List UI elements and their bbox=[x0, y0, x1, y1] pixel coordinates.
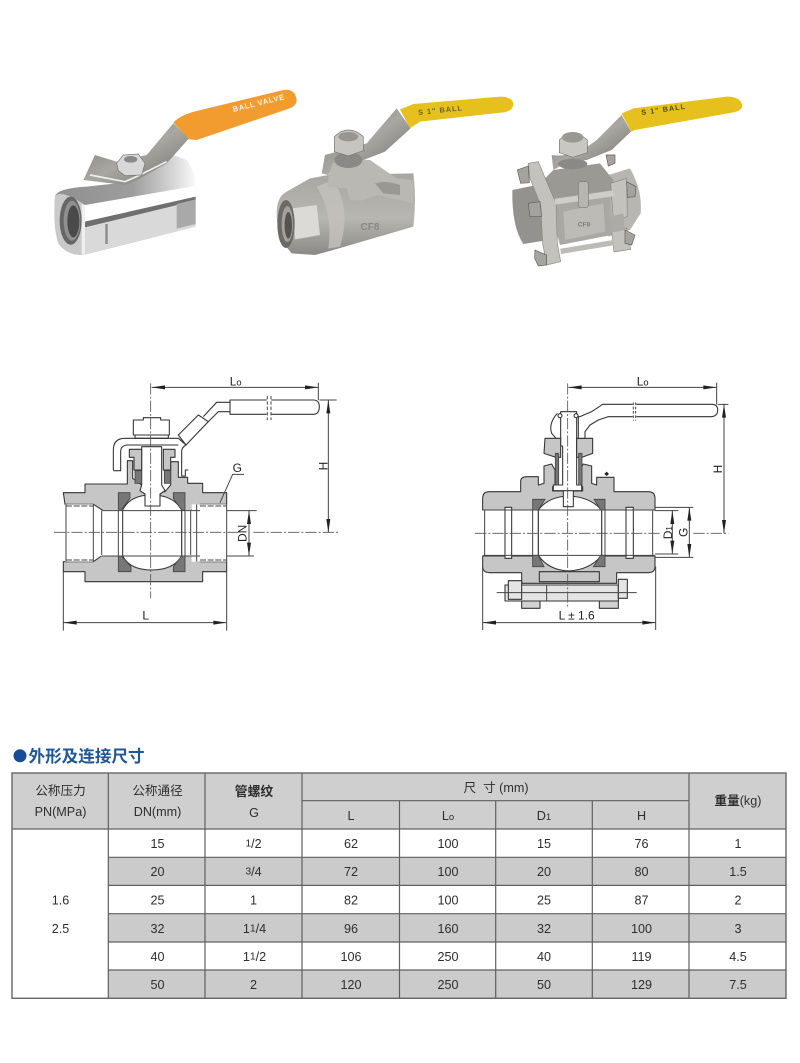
thread label G bbox=[220, 461, 244, 503]
centre lines bbox=[54, 383, 338, 598]
row DN20: 100 bbox=[437, 865, 459, 879]
stem bbox=[140, 447, 165, 506]
dimension H: H bbox=[711, 465, 725, 473]
heading bullet bbox=[14, 749, 26, 762]
row DN25: 82 bbox=[344, 894, 358, 908]
row DN25: 1 bbox=[250, 894, 257, 908]
dimension Lo: Lo bbox=[230, 375, 242, 389]
gland and packing bbox=[544, 438, 593, 485]
column headers: D1 bbox=[537, 809, 551, 823]
end face bbox=[54, 194, 85, 255]
flanges bbox=[528, 162, 561, 265]
header background bbox=[12, 773, 786, 829]
dimension L: L bbox=[142, 609, 149, 623]
body marking: CF8 bbox=[578, 222, 591, 229]
handle grip bbox=[230, 400, 319, 414]
steel lever bbox=[322, 108, 411, 175]
steel lever bbox=[83, 123, 189, 185]
row DN15 bbox=[150, 837, 742, 851]
row DN50: 2 bbox=[250, 978, 257, 992]
row DN50: 50 bbox=[150, 978, 165, 992]
row DN25 bbox=[150, 894, 742, 908]
dimension Lo bbox=[568, 375, 717, 404]
row DN40: 1 bbox=[250, 950, 256, 962]
row DN32: 160 bbox=[437, 922, 459, 936]
orange grip bbox=[173, 90, 297, 140]
row DN32: 32 bbox=[150, 922, 165, 936]
yellow grip bbox=[400, 97, 513, 128]
dimension G: G bbox=[677, 528, 691, 537]
dimension H bbox=[711, 404, 728, 533]
row DN40: 106 bbox=[340, 950, 362, 964]
bolt heads bbox=[517, 155, 636, 266]
row DN15: 1 bbox=[245, 838, 251, 850]
row DN50: 120 bbox=[340, 978, 362, 992]
row DN25: 100 bbox=[437, 894, 459, 908]
upper body section bbox=[63, 461, 227, 511]
row DN32: /4 bbox=[256, 922, 266, 936]
pressure values: 1.6 bbox=[52, 894, 69, 908]
dimensions table bbox=[12, 773, 786, 998]
stem nut bbox=[133, 418, 169, 438]
row DN40: 1 bbox=[243, 950, 250, 964]
row DN15: 100 bbox=[437, 837, 459, 851]
photo: one-piece ball valve with orange handle bbox=[54, 90, 297, 255]
body marking: CF8 bbox=[361, 222, 380, 233]
valve body bbox=[55, 155, 196, 255]
column headers: 尺 寸 (mm) bbox=[463, 781, 529, 795]
photo: three-piece ball valve with yellow handle bbox=[512, 97, 742, 266]
lower body section bbox=[483, 556, 655, 583]
column headers: 公称压力 bbox=[35, 784, 86, 798]
bore and ball bbox=[483, 496, 655, 571]
row DN25: 25 bbox=[150, 894, 165, 908]
photo: two-piece ball valve with yellow handle: S 1" BALL bbox=[418, 103, 463, 117]
dimension Lo bbox=[152, 375, 318, 400]
lower body section bbox=[63, 555, 227, 582]
pressure values: 2.5 bbox=[52, 922, 69, 936]
gland and packing bbox=[129, 449, 175, 483]
row DN15: 62 bbox=[344, 837, 358, 851]
upper body bbox=[543, 163, 613, 205]
steel lever bbox=[552, 115, 631, 170]
tie rods bbox=[555, 193, 613, 202]
row DN40: 40 bbox=[150, 950, 165, 964]
dimension L tolerance: L ± 1.6 bbox=[559, 609, 595, 623]
row DN50: 7.5 bbox=[729, 978, 747, 992]
section heading bbox=[14, 747, 145, 766]
row DN32: 3 bbox=[734, 922, 742, 936]
stop plate bbox=[113, 438, 188, 476]
row DN40: 40 bbox=[537, 950, 551, 964]
photo: three-piece ball valve with yellow handle: S 1" BALL bbox=[641, 102, 687, 117]
column headers: 管螺纹 bbox=[235, 784, 273, 799]
dimension H bbox=[316, 400, 337, 532]
row DN32: 32 bbox=[537, 922, 551, 936]
stem nut bbox=[558, 159, 587, 169]
row DN15: /2 bbox=[251, 837, 262, 851]
row DN20: 72 bbox=[344, 865, 358, 879]
centre lines bbox=[475, 383, 728, 607]
row DN20: 20 bbox=[537, 865, 551, 879]
bore and ball bbox=[65, 495, 227, 570]
striped rows background bbox=[108, 857, 786, 998]
row DN32: 1 bbox=[250, 922, 256, 934]
stem bbox=[553, 412, 582, 507]
row DN32 bbox=[150, 922, 742, 936]
row DN20 bbox=[150, 865, 747, 879]
row DN25: 2 bbox=[734, 894, 742, 908]
row DN25: 25 bbox=[537, 894, 551, 908]
dimension DN bbox=[227, 511, 257, 556]
row DN40 bbox=[150, 950, 747, 964]
threaded port bbox=[60, 197, 82, 245]
row DN15: 1 bbox=[734, 837, 742, 851]
dimension D1 bbox=[655, 511, 678, 554]
row DN40: 119 bbox=[631, 950, 652, 964]
stem nut bbox=[117, 154, 145, 176]
column headers: G bbox=[249, 806, 259, 820]
thread label G: G bbox=[233, 461, 242, 475]
top boss bbox=[328, 158, 413, 203]
dimension L tolerance bbox=[483, 567, 656, 630]
row DN20: 20 bbox=[150, 865, 165, 879]
column headers: 重量(kg) bbox=[715, 793, 761, 808]
dimension DN: DN bbox=[236, 525, 250, 542]
dimension H: H bbox=[316, 462, 330, 470]
row DN50: 250 bbox=[437, 978, 459, 992]
tie bolt bbox=[497, 579, 637, 608]
row DN15: 15 bbox=[537, 837, 551, 851]
row DN50 bbox=[150, 978, 747, 992]
column headers: PN(MPa) bbox=[35, 805, 86, 819]
row DN20: 1.5 bbox=[729, 865, 747, 879]
dimension D1: D1 bbox=[661, 526, 675, 539]
row DN40: /2 bbox=[256, 950, 266, 964]
row DN15: 76 bbox=[634, 837, 649, 851]
column headers: 公称通径 bbox=[132, 784, 183, 798]
column headers: DN(mm) bbox=[134, 805, 181, 819]
column headers: H bbox=[637, 809, 646, 823]
ball seats bbox=[118, 493, 185, 572]
handle arm bbox=[178, 415, 208, 445]
row DN50: 50 bbox=[537, 978, 551, 992]
row DN40: 4.5 bbox=[729, 950, 747, 964]
row DN32: 1 bbox=[243, 922, 250, 936]
dimension G bbox=[655, 507, 693, 557]
table grid bbox=[12, 773, 786, 998]
photo: one-piece ball valve with orange handle: BALL VALVE bbox=[232, 92, 286, 114]
dimension Lo: Lo bbox=[637, 375, 649, 389]
column headers: Lo bbox=[442, 809, 454, 823]
diagram: three-piece valve section with dimensions bbox=[475, 375, 728, 630]
diagram: two-piece valve section with dimensions bbox=[54, 375, 338, 631]
heading text: 外形及连接尺寸 bbox=[28, 747, 145, 766]
row DN20: 3 bbox=[245, 866, 251, 878]
stop lug bbox=[551, 413, 609, 476]
photo: two-piece ball valve with yellow handle bbox=[277, 97, 513, 255]
valve body bbox=[277, 173, 415, 255]
row DN50: 129 bbox=[631, 978, 652, 992]
row DN32: 96 bbox=[344, 922, 358, 936]
yellow grip bbox=[622, 97, 742, 132]
threaded port bbox=[277, 200, 295, 248]
column headers bbox=[35, 781, 761, 823]
row DN32: 100 bbox=[631, 922, 652, 936]
row DN15: 15 bbox=[150, 837, 165, 851]
stem nut bbox=[334, 152, 362, 168]
right end cap bbox=[608, 168, 641, 237]
row DN40: 250 bbox=[437, 950, 459, 964]
row DN25: 87 bbox=[634, 894, 649, 908]
handle bbox=[578, 404, 718, 438]
table frame bbox=[12, 773, 786, 998]
upper body section bbox=[483, 464, 655, 510]
centre body bbox=[547, 192, 612, 245]
ball seats bbox=[533, 499, 605, 567]
column headers: L bbox=[347, 809, 355, 823]
row DN20: 80 bbox=[634, 865, 649, 879]
left end cap bbox=[512, 184, 548, 244]
pressure values bbox=[52, 894, 69, 936]
row DN20: /4 bbox=[251, 865, 262, 879]
hex end face bbox=[293, 205, 320, 239]
dimension L bbox=[63, 572, 227, 631]
